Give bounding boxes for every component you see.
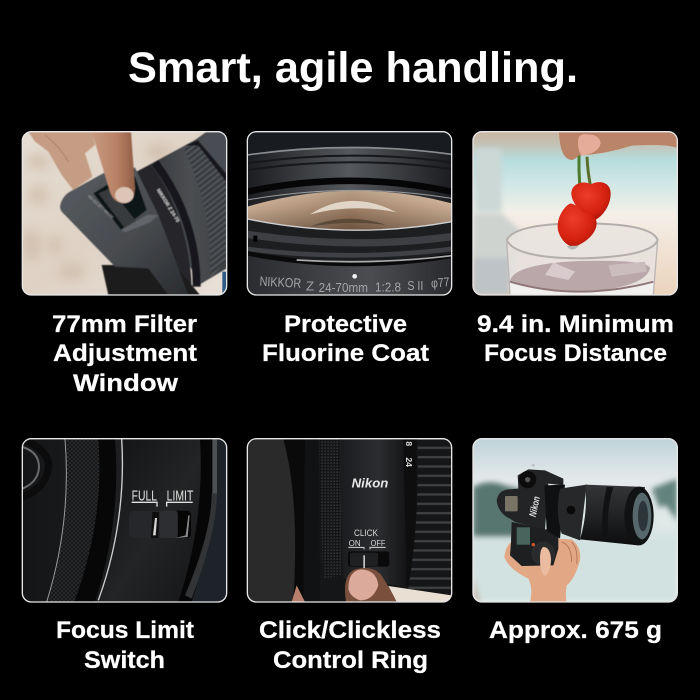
label: 77mm filter adjustment window: 77mm Filter [52, 311, 197, 338]
title: Smart, agile handling. [128, 44, 578, 92]
photo: front lens element with NIKKOR text: φ77 [430, 275, 450, 291]
photo: click switch and Nikon badge: CLICK [354, 528, 378, 538]
photo: hand holding camera with lens [473, 439, 677, 602]
label: 9.4 in. minimum focus distance: Focus Distance [484, 340, 667, 367]
photo: click switch and Nikon badge: OFF [371, 539, 385, 548]
label: focus limit switch [56, 617, 194, 674]
label: protective fluorine coat: Fluorine Coat [262, 340, 429, 367]
label: focus limit switch: Focus Limit [56, 617, 194, 644]
label: 77mm filter adjustment window: Adjustment [53, 340, 197, 367]
photo: finger in lens hood window: NIKKOR Z 24-70 [155, 188, 180, 224]
label: 9.4 in. minimum focus distance: 9.4 in. Minimum [477, 311, 674, 338]
label: protective fluorine coat [262, 311, 429, 367]
photo: click switch and Nikon badge: 24 [404, 457, 414, 467]
photo: front lens element with NIKKOR text [247, 132, 452, 295]
photo: front lens element with NIKKOR text: S II [407, 278, 423, 293]
photo: focus limit switch on barrel: FULL [132, 488, 157, 504]
label: 77mm filter adjustment window [52, 311, 197, 397]
panel: 9.4 in. minimum focus distance [473, 132, 677, 367]
photo: focus limit switch on barrel [22, 439, 227, 602]
photo: finger in lens hood window [22, 132, 227, 295]
photo: front lens element with NIKKOR text: Z [306, 279, 314, 294]
label: 77mm filter adjustment window: Window [73, 370, 178, 397]
label: protective fluorine coat: Protective [284, 311, 407, 338]
photo: finger in lens hood window: HB-112 Ø77 NIKON [87, 194, 114, 219]
panel: approx. 675 g [473, 439, 677, 644]
photo: click switch and Nikon badge [247, 439, 452, 602]
label: click/clickless control ring: Click/Clickless [259, 617, 441, 644]
label: 9.4 in. minimum focus distance [477, 311, 674, 367]
label: click/clickless control ring: Control Ring [273, 647, 428, 674]
photo: click switch and Nikon badge: Nikon [352, 476, 389, 490]
label: focus limit switch: Switch [84, 647, 165, 674]
photo: click switch and Nikon badge: 8 [404, 441, 414, 446]
panel: protective fluorine coat [247, 132, 452, 367]
photo: cherries over a glass of water [473, 132, 677, 295]
label: approx. 675 g: Approx. 675 g [489, 617, 662, 644]
photo: front lens element with NIKKOR text: NIKKOR [259, 274, 302, 291]
photo: hand holding camera with lens: Nikon [528, 495, 543, 518]
photo: front lens element with NIKKOR text: 24-70mm [319, 280, 368, 295]
photo: focus limit switch on barrel: LIMIT [167, 488, 193, 504]
panel: click/clickless control ring [247, 439, 452, 674]
panel: focus limit switch [22, 439, 227, 674]
photo: click switch and Nikon badge: ON [349, 539, 361, 548]
photo: front lens element with NIKKOR text: 1:2.8 [375, 279, 401, 294]
panel: 77mm filter adjustment window [22, 132, 227, 397]
label: click/clickless control ring [259, 617, 441, 674]
